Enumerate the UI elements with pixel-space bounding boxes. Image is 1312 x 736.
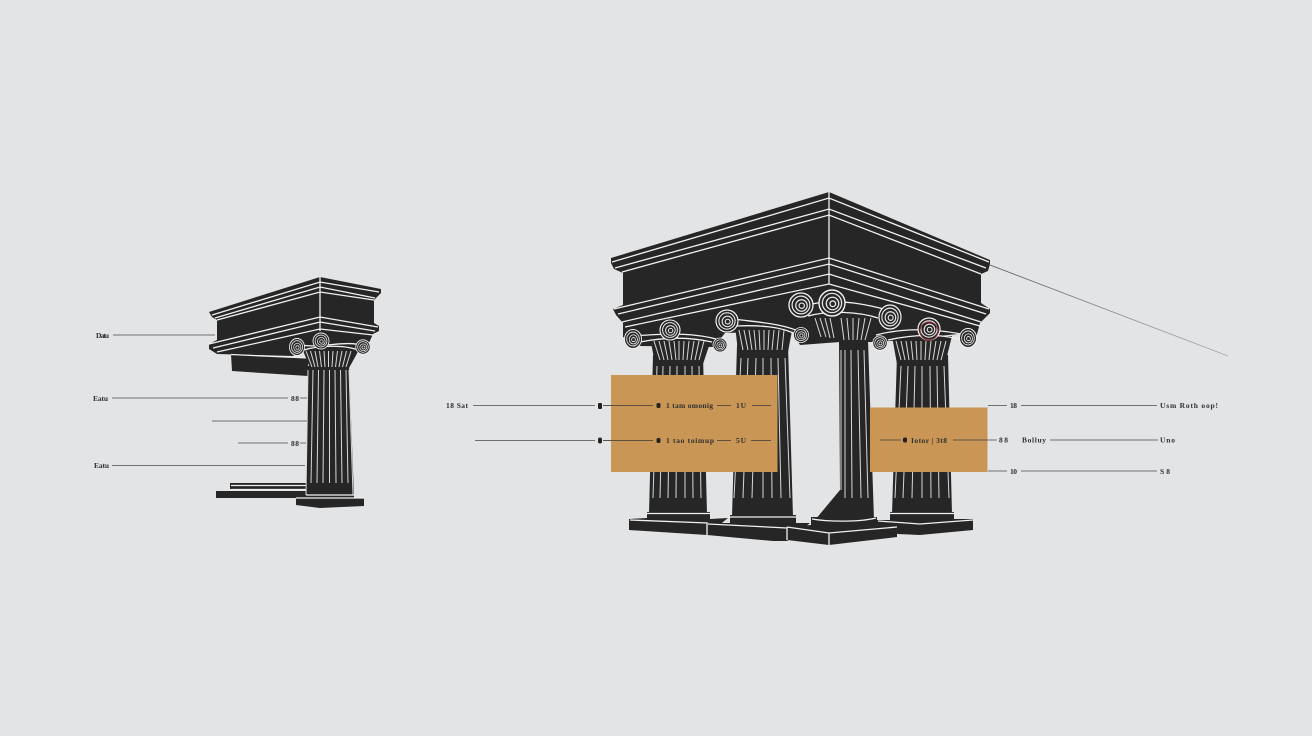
left labels: 88 (291, 439, 299, 448)
left labels: Eatu (93, 394, 108, 403)
capital column 1 (624, 320, 727, 364)
capitals (624, 290, 976, 364)
left labels: Datu (96, 331, 109, 340)
orange panel left: 1 tam omonig (666, 401, 713, 410)
left leader lines (112, 335, 307, 466)
right leader lines and labels: Bolluy (1022, 436, 1046, 444)
column 1 (629, 355, 728, 535)
right leader lines and labels: Uno (1160, 436, 1175, 444)
capital column 4 (873, 318, 976, 364)
orange panel left (603, 375, 778, 472)
orange panel left: 1 tao toimup (666, 436, 714, 445)
right leader lines and labels: Usm Roth oop! (1160, 401, 1218, 410)
column 2 (707, 345, 810, 541)
right leader lines and labels: 18 (1010, 401, 1017, 410)
capital column 2 (716, 310, 808, 352)
small entablature (209, 277, 381, 358)
left labels: 88 (291, 394, 299, 403)
column 3 with diagonal brace (787, 340, 897, 545)
right leader lines and labels: S8 (1160, 467, 1170, 476)
entablature (611, 192, 990, 347)
small plinth and steps (216, 483, 308, 498)
orange panel left: 5U (736, 436, 747, 445)
right leader lines and labels: 88 (999, 436, 1008, 444)
left leader lines of temple: 18 Sat (446, 401, 468, 410)
diagonal leader line (990, 265, 1228, 356)
large temple diagram (446, 192, 1228, 545)
left labels (93, 331, 299, 470)
small column shaft (306, 366, 354, 496)
capital column 3 (789, 290, 901, 342)
left labels: Eatu (94, 461, 109, 470)
small beam (231, 354, 308, 376)
small column diagram (93, 277, 381, 508)
right leader lines and labels: 10 (1010, 467, 1017, 476)
small column base (296, 495, 364, 508)
left leader lines of temple (446, 401, 602, 444)
small capital (290, 333, 370, 368)
right leader lines and labels (987, 401, 1218, 476)
orange panel left: 1U (736, 401, 747, 410)
orange panel right (870, 408, 988, 472)
orange panel right: Iotor | 3t8 (911, 436, 947, 445)
column 4 (877, 355, 973, 535)
